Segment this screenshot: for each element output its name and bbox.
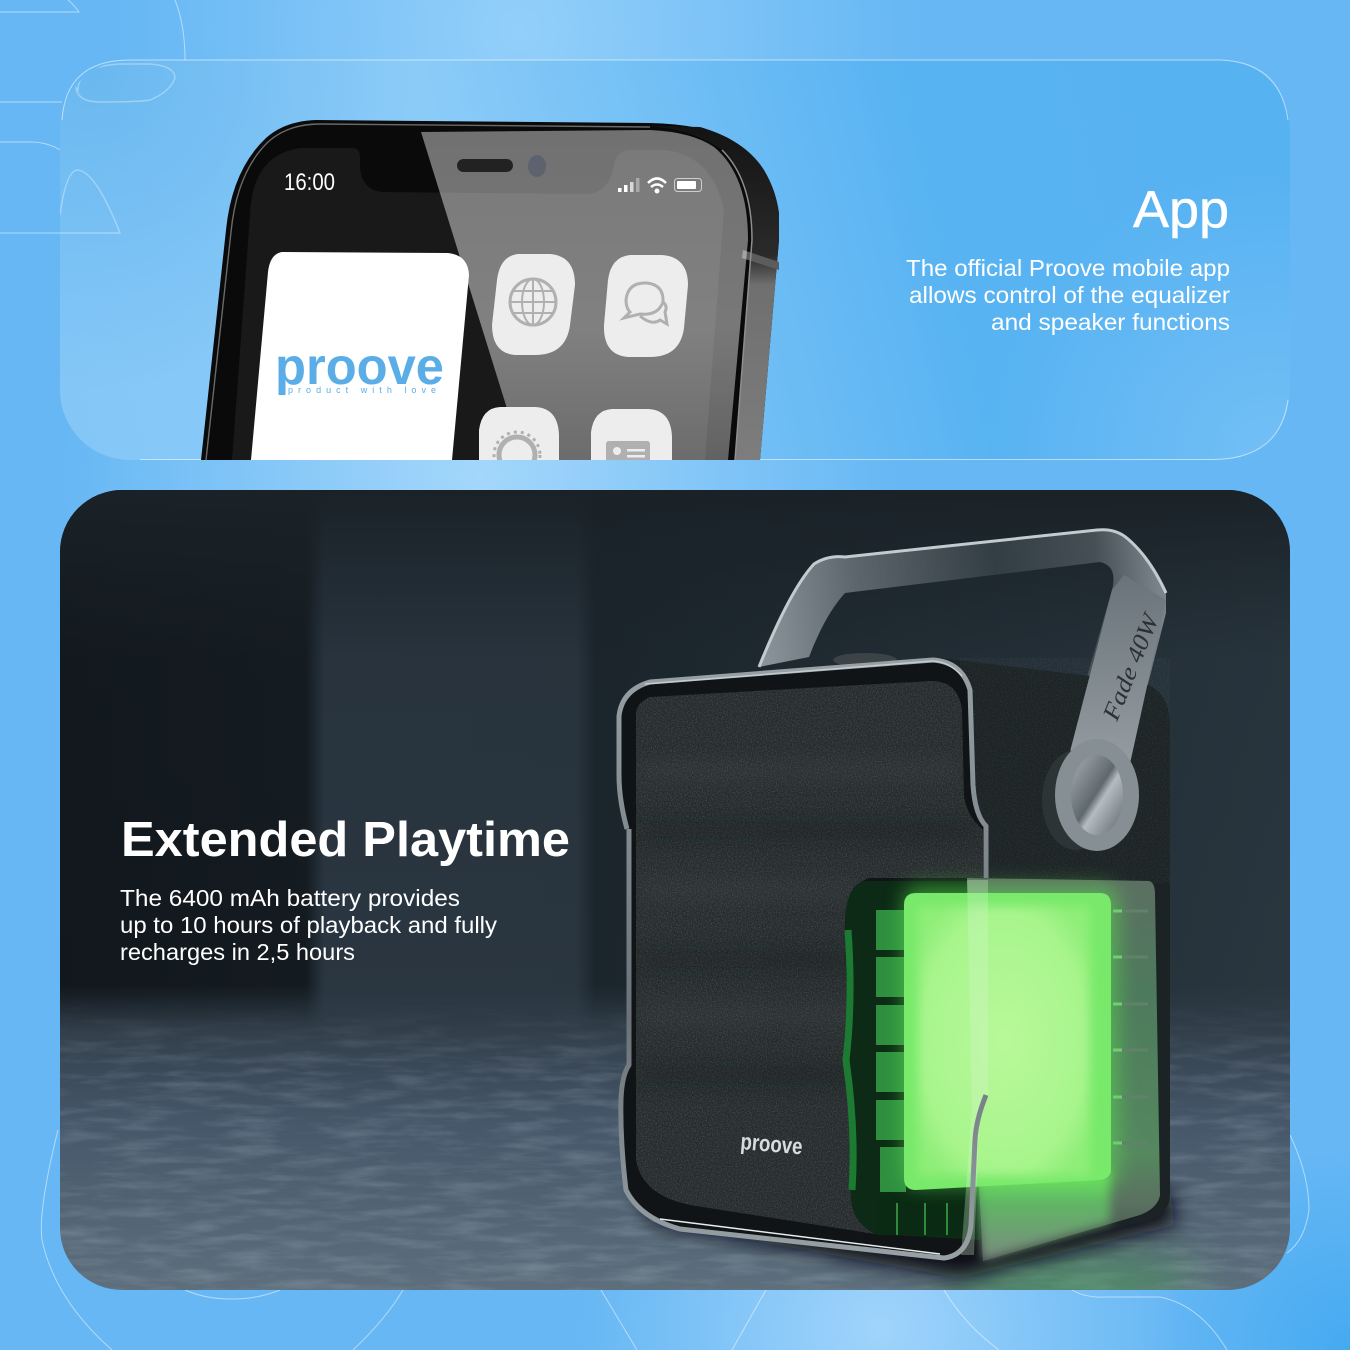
text: playtime description: The 6400 mAh battery provides xyxy=(120,885,460,911)
panel background xyxy=(60,60,1290,460)
text: app description: and speaker functions xyxy=(991,309,1230,335)
heading: app: App xyxy=(1133,181,1229,239)
floor xyxy=(60,985,1290,1290)
shell ridges xyxy=(1113,911,1148,1143)
text: playtime description: up to 10 hours of playback and fully xyxy=(120,912,498,938)
status time: 16:00 xyxy=(284,169,335,196)
product logo: proove: proove xyxy=(740,1128,804,1159)
handle arm xyxy=(1070,575,1166,762)
green battery glow xyxy=(904,886,1118,1186)
text: playtime description: recharges in 2,5 hours xyxy=(120,939,355,965)
hub xyxy=(1042,739,1139,851)
text: playtime description xyxy=(120,885,498,965)
screen glare xyxy=(421,130,748,460)
panel outline xyxy=(62,60,1288,460)
metal frame xyxy=(619,660,986,1258)
text: app description xyxy=(906,255,1230,335)
fabric front xyxy=(630,675,990,1245)
speaker grille xyxy=(457,159,513,172)
floor glow xyxy=(948,1247,1194,1290)
speaker front body xyxy=(619,660,986,1258)
phone body xyxy=(201,120,779,460)
backdrop wall xyxy=(60,490,1290,1050)
handle xyxy=(758,528,1168,685)
proove logo: proove xyxy=(275,338,444,396)
panel: app xyxy=(60,60,1290,478)
text: app description: allows control of the equalizer xyxy=(909,282,1230,308)
shell lower glow xyxy=(975,1170,1110,1260)
top knob xyxy=(833,653,897,664)
speaker xyxy=(619,530,1170,1262)
wifi icon xyxy=(648,178,666,192)
product label: Fade 40W: Fade 40W xyxy=(1098,609,1165,725)
battery cavity xyxy=(845,881,980,1240)
phone mockup xyxy=(201,120,779,478)
shell highlight strip xyxy=(961,880,988,1255)
front camera xyxy=(528,155,546,177)
panel: extended playtime xyxy=(60,490,1290,1311)
leather back xyxy=(940,658,1170,1262)
app icon: settings xyxy=(479,407,559,460)
translucent shell xyxy=(967,878,1160,1261)
heading: extended playtime: Extended Playtime xyxy=(121,813,570,867)
app icon: contact xyxy=(591,409,672,460)
app icon: globe xyxy=(492,254,575,355)
speaker shadow xyxy=(640,1190,1175,1278)
tagline: product with love xyxy=(288,385,436,395)
text: app description: The official Proove mobile app xyxy=(906,255,1230,281)
signal icon xyxy=(618,178,640,192)
app icon: chat xyxy=(604,255,688,357)
green battery xyxy=(904,893,1111,1190)
battery icon xyxy=(674,178,702,192)
phone screen xyxy=(232,148,724,460)
app card: proove xyxy=(251,252,469,460)
